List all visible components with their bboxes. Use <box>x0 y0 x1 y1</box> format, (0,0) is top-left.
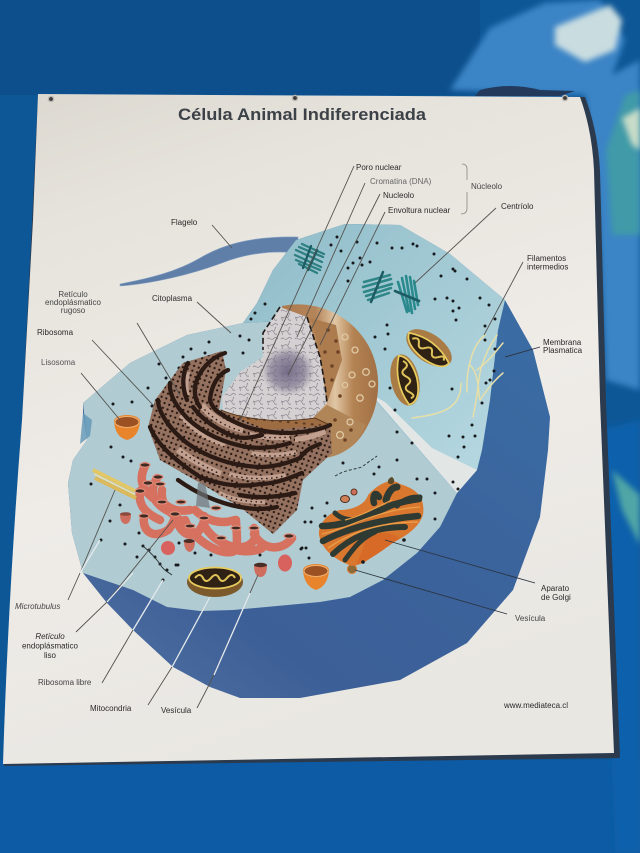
nuclear envelope sphere <box>265 304 378 458</box>
chromatin cut face <box>222 307 327 423</box>
nucleus <box>221 304 378 458</box>
labels: Ribosoma <box>37 328 74 337</box>
leader line highlights over blue <box>80 540 250 675</box>
dashed envelope edge <box>263 307 327 403</box>
poster sheet <box>3 94 620 766</box>
labels: rugoso <box>61 306 86 315</box>
grommets <box>48 95 568 102</box>
lower envelope lip <box>221 410 330 434</box>
pores <box>322 334 375 448</box>
labels: Membrana <box>543 338 582 347</box>
rough endoplasmic reticulum <box>148 351 332 534</box>
illustrated animal cell <box>68 224 550 698</box>
labels: Nucleolo <box>383 191 415 200</box>
labels: Mitocondria <box>90 704 132 713</box>
Golgi apparatus <box>319 477 423 566</box>
smooth endoplasmic reticulum <box>140 466 292 552</box>
labels: Retículo <box>35 632 65 641</box>
labels: Lisosoma <box>41 358 76 367</box>
vesicles <box>120 489 357 577</box>
smooth ER tube openings <box>135 463 294 540</box>
labels: Plasmatica <box>543 346 583 355</box>
labels: Flagelo <box>171 218 198 227</box>
leader lines <box>68 166 540 708</box>
labels: Vesícula <box>161 706 192 715</box>
cytoplasm, upper section <box>243 224 505 493</box>
pink cisternae <box>176 372 326 504</box>
labels: Filamentos <box>527 254 566 263</box>
labels: Núcleolo <box>471 182 503 191</box>
free ribosomes <box>91 237 495 580</box>
nucleolus <box>261 346 315 396</box>
mitochondria <box>187 322 458 597</box>
lysosomes <box>114 415 329 590</box>
title: Célula Animal Indiferenciada <box>178 106 427 124</box>
labels: Centríolo <box>501 202 534 211</box>
labels: www.mediateca.cl <box>503 701 568 710</box>
labels: liso <box>44 651 57 660</box>
labels: Ribosoma libre <box>38 678 92 687</box>
centrioles <box>295 244 419 313</box>
grey fold shading <box>196 483 210 508</box>
notch shading <box>80 413 92 444</box>
labels: endoplásmatico <box>22 642 79 650</box>
labels: Aparato <box>541 584 570 593</box>
labels: Retículo <box>58 290 88 299</box>
labels: Microtubulus <box>15 602 60 611</box>
intermediate filaments <box>412 335 503 418</box>
labels: endoplásmatico <box>45 298 102 307</box>
labels <box>15 163 583 715</box>
labels: intermedios <box>527 262 568 272</box>
microtubules <box>93 470 136 498</box>
nucleus bracket <box>461 164 467 214</box>
labels: de Golgi <box>541 593 571 602</box>
cell membrane, dark blue outer mass <box>68 224 550 698</box>
labels: Citoplasma <box>152 294 193 303</box>
flagellum <box>120 237 298 286</box>
labels: Envoltura nuclear <box>388 206 451 215</box>
labels: Vesícula <box>515 614 546 623</box>
cut wedge highlight <box>372 395 477 493</box>
cytoplasm, lower section <box>68 320 457 611</box>
labels: Cromatina (DNA) <box>370 177 432 186</box>
labels: Poro nuclear <box>356 163 402 172</box>
microfilament beaded strand <box>335 456 377 476</box>
